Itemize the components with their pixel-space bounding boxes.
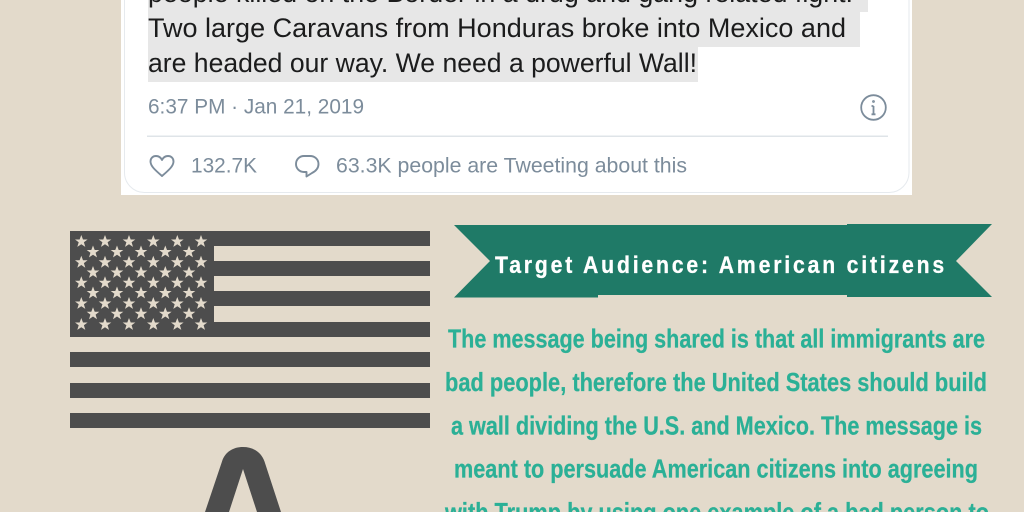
panel: tweet card <box>121 0 912 195</box>
card border <box>124 0 909 193</box>
icon: arrow tip <box>205 447 281 512</box>
icon: info <box>861 95 886 120</box>
banner heading: Target Audience: American citizens <box>495 252 947 279</box>
like count: 132.7K <box>191 154 257 178</box>
banner: target audience <box>454 224 992 298</box>
tweet text: Two large Caravans from Honduras broke into Mexico and <box>148 13 846 43</box>
tweet card background <box>121 0 912 195</box>
body paragraph <box>444 324 989 512</box>
tweet timestamp: 6:37 PM · Jan 21, 2019 <box>148 96 364 118</box>
icon: heart <box>150 156 174 176</box>
banner ribbon <box>454 224 992 298</box>
icon: American flag <box>70 231 430 428</box>
flag stars <box>75 235 207 330</box>
tweet text: are headed our way. We need a powerful Wall! <box>148 48 697 78</box>
tweet text highlight <box>148 0 868 82</box>
flag canton <box>70 231 214 337</box>
retweet count text: 63.3K people are Tweeting about this <box>336 154 687 178</box>
icon: speech bubble <box>296 156 318 176</box>
flag stripes <box>70 231 430 428</box>
divider <box>147 136 888 137</box>
tweet text <box>148 0 853 78</box>
